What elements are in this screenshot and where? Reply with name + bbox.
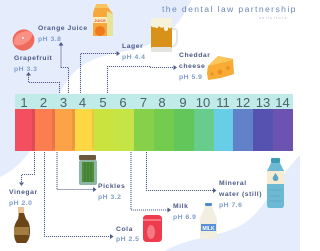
arrow: cola: [44, 152, 114, 239]
label: pickles: pH 3.2: [98, 194, 121, 201]
label: orange juice: Orange Juice: [38, 25, 88, 32]
label: grapefruit: Grapefruit: [14, 55, 53, 62]
label: mineral water: water (still): [218, 191, 262, 198]
scale numbers: 6: [119, 95, 127, 110]
label: vinegar: [9, 189, 38, 207]
icon: vinegar bottle: [14, 207, 30, 243]
arrow: milk: [131, 152, 171, 212]
colour bands: [15, 109, 293, 151]
scale numbers: [20, 95, 290, 110]
label: cola: pH 2.5: [116, 236, 139, 243]
icon: milk bottle: [200, 203, 217, 239]
label: orange juice: [38, 25, 88, 43]
label: cheddar cheese: [179, 52, 210, 81]
icon: pickle jar: [79, 155, 97, 185]
arrow: cheddar cheese: [108, 65, 177, 93]
arrow: vinegar: [19, 152, 34, 186]
scale numbers: 10: [196, 95, 210, 110]
scale numbers: 8: [158, 95, 166, 110]
scale numbers: 11: [216, 95, 230, 110]
icon: cheese: [207, 56, 234, 80]
arrow: mineral water: [146, 152, 216, 193]
label: cola: Cola: [116, 226, 133, 233]
scale numbers: 3: [60, 95, 67, 110]
label: mineral water: pH 7.6: [219, 202, 242, 209]
scale numbers: 13: [256, 95, 270, 110]
scale numbers: 1: [20, 95, 28, 110]
label: milk: Milk: [173, 203, 188, 210]
label: grapefruit: [14, 55, 53, 73]
label: cheddar cheese: cheese: [179, 63, 205, 70]
label: pickles: Pickles: [98, 183, 125, 190]
arrow: orange juice: [58, 42, 68, 93]
label: mineral water: [218, 180, 262, 209]
label: grapefruit: pH 3.3: [14, 66, 37, 73]
icon: milk bottle: MILK: [202, 226, 215, 232]
icon: juice carton: [93, 4, 113, 36]
label: lager: pH 4.4: [122, 54, 145, 61]
label: cola: [116, 226, 139, 243]
scale numbers: 4: [79, 95, 86, 110]
icon: grapefruit: [9, 26, 38, 54]
scale numbers: 14: [275, 95, 290, 110]
scale numbers: 7: [140, 95, 147, 110]
label: milk: pH 6.9: [173, 214, 196, 221]
label: mineral water: Mineral: [219, 180, 247, 187]
arrow: grapefruit: [26, 72, 60, 93]
label: vinegar: Vinegar: [9, 189, 38, 196]
scale numbers: 12: [236, 95, 250, 110]
scale numbers: 9: [179, 95, 187, 110]
logo: the dental law partnership: solicitors: [259, 16, 288, 20]
label: lager: Lager: [122, 43, 143, 50]
label: cheddar cheese: pH 5.9: [179, 74, 202, 81]
icon: water bottle: [267, 158, 284, 208]
label: milk: [173, 203, 196, 221]
pH scale: [15, 94, 293, 151]
arrow: lager: [80, 51, 120, 93]
label: cheddar cheese: Cheddar: [179, 52, 210, 59]
icon: cola can: [143, 215, 162, 242]
scale numbers: 5: [99, 95, 107, 110]
logo: the dental law partnership: the dental law partnership: [162, 4, 297, 14]
label: orange juice: pH 3.8: [38, 36, 61, 43]
label: pickles: [98, 183, 125, 201]
label: vinegar: pH 2.0: [9, 200, 32, 207]
label: lager: [122, 43, 145, 61]
logo: the dental law partnership: [162, 4, 297, 20]
icon: juice carton: JUICE: [94, 18, 106, 23]
scale numbers: 2: [40, 95, 47, 110]
arrow: pickles: [57, 152, 96, 192]
icon: beer mug: [151, 18, 177, 52]
